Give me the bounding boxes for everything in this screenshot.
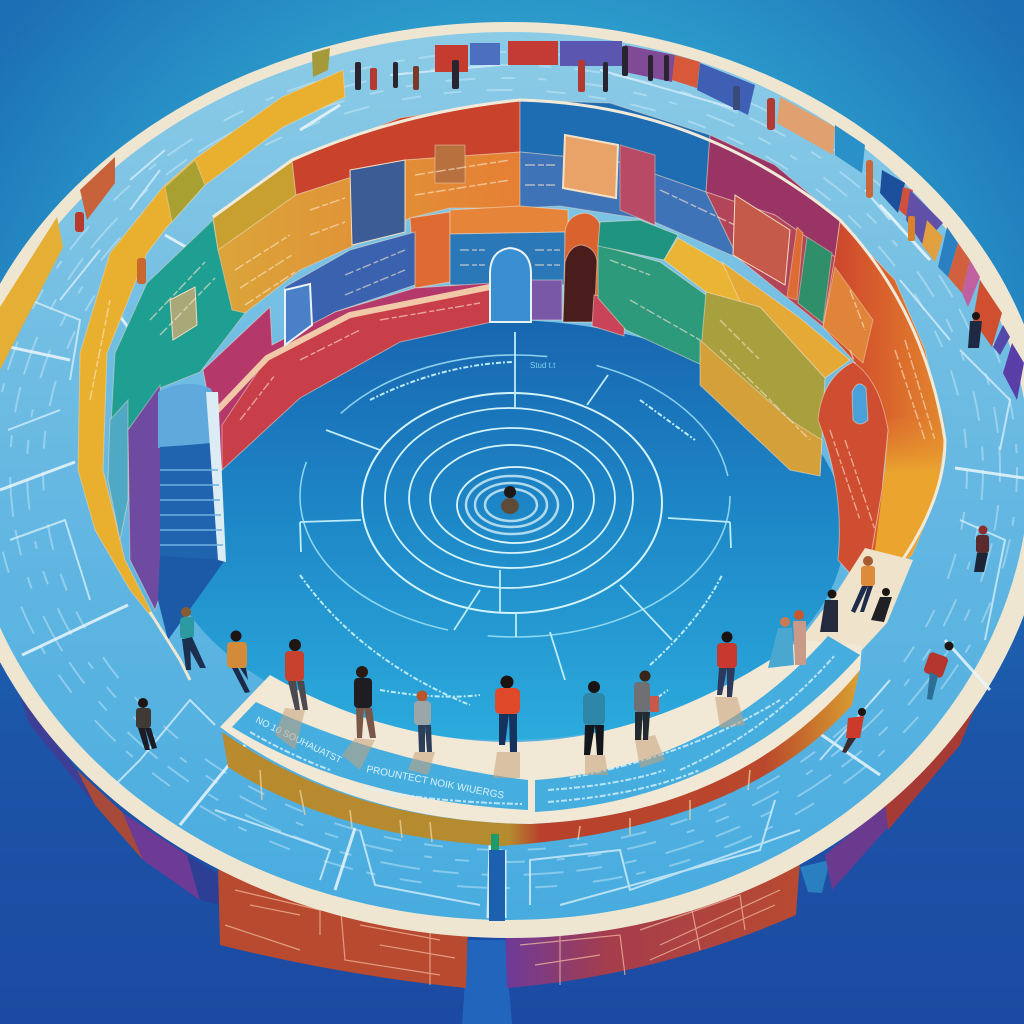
block: blue right bbox=[938, 227, 958, 277]
panel: purple strip bbox=[128, 385, 162, 610]
wall top cream edge bbox=[213, 100, 945, 590]
panel: crimson upper bbox=[203, 283, 492, 470]
sign: left bbox=[232, 702, 528, 810]
panel: dark arch wall bbox=[563, 213, 602, 322]
figure group top center bbox=[578, 46, 740, 110]
person: teal bbox=[180, 607, 206, 670]
front ledge bbox=[220, 636, 862, 846]
wall circuit lines bbox=[225, 890, 780, 985]
small people along top walkway bbox=[75, 46, 915, 284]
panel: red top band bbox=[292, 100, 520, 195]
panel: crimson magenta bbox=[620, 145, 655, 225]
green marker bbox=[491, 834, 499, 852]
block: red bbox=[435, 45, 468, 72]
lower wall tier bbox=[203, 206, 888, 590]
panel: blue teal lower bbox=[108, 400, 128, 540]
spiral core bbox=[466, 476, 558, 534]
block: purple blue bbox=[560, 41, 622, 66]
wall: front left red bbox=[218, 865, 468, 988]
picture: frame bbox=[170, 287, 197, 340]
block: blue bbox=[470, 43, 500, 65]
stairs tower bbox=[158, 384, 226, 562]
outermost ring bbox=[300, 355, 730, 637]
ring five bbox=[430, 445, 594, 553]
panel: red right block bbox=[818, 362, 888, 590]
panel: maroon top bbox=[706, 135, 840, 257]
person: orange landing bbox=[851, 556, 875, 613]
panel: red block bbox=[410, 212, 450, 288]
person: dark landing bbox=[871, 588, 892, 622]
person: red bbox=[285, 639, 308, 710]
person: tan bbox=[227, 630, 250, 693]
cream walkway bbox=[220, 640, 862, 824]
background glow bbox=[0, 0, 1024, 324]
panel: blue tier left bbox=[285, 232, 415, 345]
panel dividers bbox=[0, 105, 1024, 918]
panel: olive middle bbox=[700, 292, 825, 474]
picture: orange bbox=[563, 135, 618, 198]
lower light strip bbox=[462, 940, 512, 1024]
block: red right bbox=[948, 243, 970, 293]
panel: green right bbox=[798, 237, 832, 323]
panel: blue window bbox=[852, 384, 868, 424]
wall: left purple bbox=[123, 813, 200, 900]
side panel bbox=[206, 392, 226, 562]
sign text middle: PROUNTECT NOIK WIUERGS bbox=[365, 764, 505, 802]
panel: orange narrow bbox=[787, 227, 803, 300]
block: left gold bbox=[0, 217, 63, 370]
body bbox=[501, 498, 519, 514]
wall: far right red bbox=[885, 703, 977, 830]
tower cap bbox=[158, 384, 220, 448]
sign text rows bbox=[250, 655, 835, 804]
cream strip on crimson bbox=[210, 287, 490, 418]
panel: magenta below bbox=[706, 192, 835, 327]
panel: yellow strip bbox=[664, 238, 762, 312]
person: walkway right dark red bbox=[974, 526, 989, 572]
block: purple small bbox=[993, 325, 1010, 355]
floor slot bbox=[489, 850, 505, 921]
front face bbox=[222, 668, 860, 846]
wall: right purple bbox=[825, 800, 890, 890]
upper colored wall tier bbox=[78, 70, 945, 625]
block: top left olive bbox=[312, 48, 330, 77]
block: dark blue bbox=[880, 170, 905, 213]
person: dark bbox=[820, 590, 838, 632]
person: walkway left bbox=[136, 698, 157, 750]
outer wall segments bbox=[20, 697, 977, 988]
panel: orange strip bbox=[450, 206, 568, 234]
arch: blue passage bbox=[490, 248, 531, 322]
block: purple bbox=[906, 190, 943, 245]
floor text rows bbox=[300, 362, 722, 710]
figure group top right bbox=[767, 98, 915, 241]
block: orange bbox=[672, 55, 700, 88]
sign text left: NO 10 SOUHAUATST bbox=[254, 715, 343, 766]
person: orange beside bbox=[793, 610, 806, 665]
panel: teal strip bbox=[108, 220, 245, 540]
floor shadow under stairs bbox=[158, 555, 225, 640]
panel: blue lower bbox=[520, 152, 738, 258]
block: red orange bbox=[973, 280, 1002, 347]
person: blue bbox=[583, 681, 605, 755]
wall text lines bbox=[90, 160, 935, 440]
panel: orange tier bbox=[218, 152, 520, 313]
picture: small brown bbox=[435, 145, 465, 183]
wall: front right bbox=[505, 860, 800, 988]
panel: blue with arch bbox=[450, 232, 565, 285]
panel: gold base bbox=[700, 340, 822, 476]
block: orange right bbox=[777, 97, 835, 155]
panel: orange outer right bbox=[870, 410, 945, 590]
wall text lines lower bbox=[240, 250, 875, 530]
wall: left dark blue bbox=[187, 855, 220, 905]
block: orange small bbox=[922, 220, 943, 262]
ring two bbox=[362, 393, 662, 613]
panel: gold ledge bbox=[722, 262, 850, 378]
figure left small bbox=[137, 258, 146, 284]
person: black vest bbox=[354, 666, 376, 738]
arch: dark doorway bbox=[563, 245, 597, 322]
person: red right bbox=[717, 632, 737, 697]
block: top left red bbox=[80, 157, 115, 220]
lower left cream edge bbox=[150, 612, 190, 680]
wall: far left dark bbox=[20, 697, 95, 805]
white tower left bbox=[285, 284, 312, 345]
block: pink bbox=[962, 260, 980, 307]
panel: purple small bbox=[530, 280, 562, 320]
picture: dark arch bbox=[350, 160, 405, 245]
ring four bbox=[409, 428, 615, 568]
person: grey bbox=[634, 670, 659, 740]
floor label: Stud t.t bbox=[530, 361, 556, 370]
head bbox=[504, 486, 516, 498]
person: orange grey bbox=[414, 690, 432, 752]
picture: magenta bbox=[733, 195, 790, 285]
ring three bbox=[385, 408, 633, 588]
block: maroon bbox=[625, 45, 675, 82]
panel: olive gold bbox=[213, 160, 296, 250]
panel: red to orange right bbox=[823, 222, 945, 592]
panel: crimson base bbox=[222, 287, 492, 470]
step lines bbox=[160, 470, 223, 545]
face panel lines bbox=[260, 770, 750, 842]
panel: outer gold strip bbox=[78, 70, 345, 625]
people on ledge and floor bbox=[136, 312, 989, 778]
block: red narrow bbox=[899, 187, 913, 217]
concentric floor diagram bbox=[300, 332, 731, 710]
panel: olive section bbox=[165, 160, 205, 222]
person: walkway lower red bbox=[842, 708, 866, 753]
panel: teal top bbox=[598, 220, 678, 260]
center figure bbox=[501, 486, 519, 514]
block: blue red bbox=[697, 63, 755, 115]
person: blue coat bbox=[768, 617, 794, 668]
block: crimson bbox=[508, 41, 558, 65]
panel: orange inset right bbox=[823, 267, 873, 363]
figure left red bbox=[75, 212, 84, 232]
block: teal blue bbox=[835, 125, 865, 173]
figure group top left bbox=[355, 60, 459, 90]
panel: crimson right bbox=[592, 295, 626, 336]
block: purple far bbox=[1003, 343, 1024, 400]
top wall blocks bbox=[0, 41, 1024, 400]
person: walkway right red bbox=[923, 642, 954, 700]
spokes bbox=[300, 332, 731, 680]
sign: right bbox=[535, 636, 860, 812]
person: red center bbox=[495, 676, 520, 752]
wall: right blue panel bbox=[800, 860, 830, 893]
person: walkway right dark bbox=[968, 312, 982, 348]
panel: blue top bbox=[520, 100, 710, 192]
ring six bbox=[457, 467, 573, 543]
shadows bbox=[275, 697, 745, 778]
central blue floor bbox=[161, 320, 845, 740]
panel: green right lower bbox=[598, 245, 706, 366]
right cream landing bbox=[800, 548, 913, 650]
steps bbox=[160, 443, 224, 560]
wall: left red bbox=[77, 770, 143, 860]
